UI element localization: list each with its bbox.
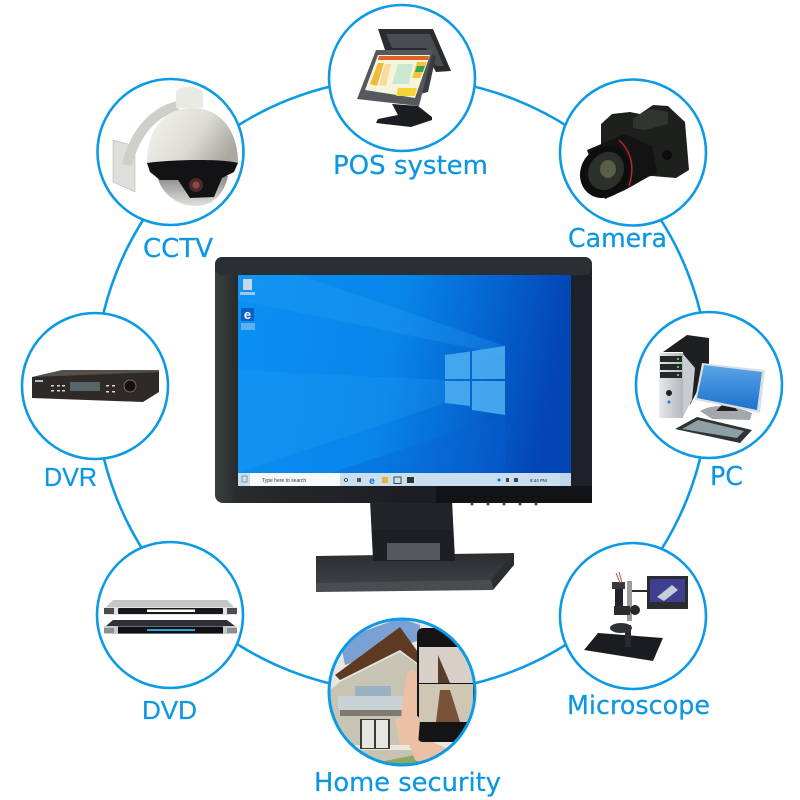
panel: Camera bbox=[560, 80, 706, 254]
photo: house and phone bbox=[330, 620, 474, 764]
icon: DSLR camera bbox=[570, 105, 689, 208]
panel: CCTV bbox=[98, 79, 244, 264]
screen bbox=[238, 275, 571, 487]
label: Camera: Camera bbox=[568, 224, 667, 254]
taskbar bbox=[238, 473, 571, 487]
taskbar: 8:44 PM bbox=[530, 478, 547, 483]
panel: DVD bbox=[97, 542, 243, 725]
panel: Microscope bbox=[560, 543, 710, 721]
taskbar: e bbox=[369, 476, 375, 487]
windows logo bbox=[445, 346, 505, 415]
label: PC: PC bbox=[710, 462, 743, 492]
panel: Home security bbox=[314, 615, 501, 798]
label: Home security: Home security bbox=[314, 768, 501, 798]
desktop icon: edge bbox=[241, 307, 255, 330]
icon: microscope with screen bbox=[584, 572, 688, 661]
label: DVD: DVD bbox=[142, 697, 197, 725]
stand base bbox=[316, 530, 514, 592]
desktop icon: recycle bin bbox=[240, 279, 255, 295]
icon: dome camera bbox=[113, 87, 238, 206]
label: CCTV: CCTV bbox=[143, 234, 214, 264]
ring: Home security bbox=[329, 619, 475, 765]
desktop icon: edge: e bbox=[244, 307, 251, 322]
panel: POS system bbox=[329, 5, 488, 181]
monitor bezel bbox=[215, 257, 592, 503]
monitor stand neck bbox=[370, 500, 455, 560]
icon: desktop computer bbox=[659, 335, 765, 443]
icon: DVR recorder bbox=[32, 370, 159, 402]
panel: DVR bbox=[22, 313, 168, 492]
taskbar: Type here to search bbox=[262, 478, 306, 484]
connecting ring bbox=[95, 78, 709, 692]
light beams bbox=[238, 275, 505, 473]
icon: DVD players bbox=[104, 600, 237, 634]
label: Microscope: Microscope bbox=[567, 691, 710, 721]
monitor bbox=[215, 257, 592, 592]
icon: POS terminal bbox=[357, 29, 451, 127]
label: POS system: POS system bbox=[333, 151, 488, 181]
monitor buttons bbox=[470, 502, 538, 506]
panel: PC bbox=[636, 312, 782, 492]
label: DVR: DVR bbox=[44, 464, 97, 492]
